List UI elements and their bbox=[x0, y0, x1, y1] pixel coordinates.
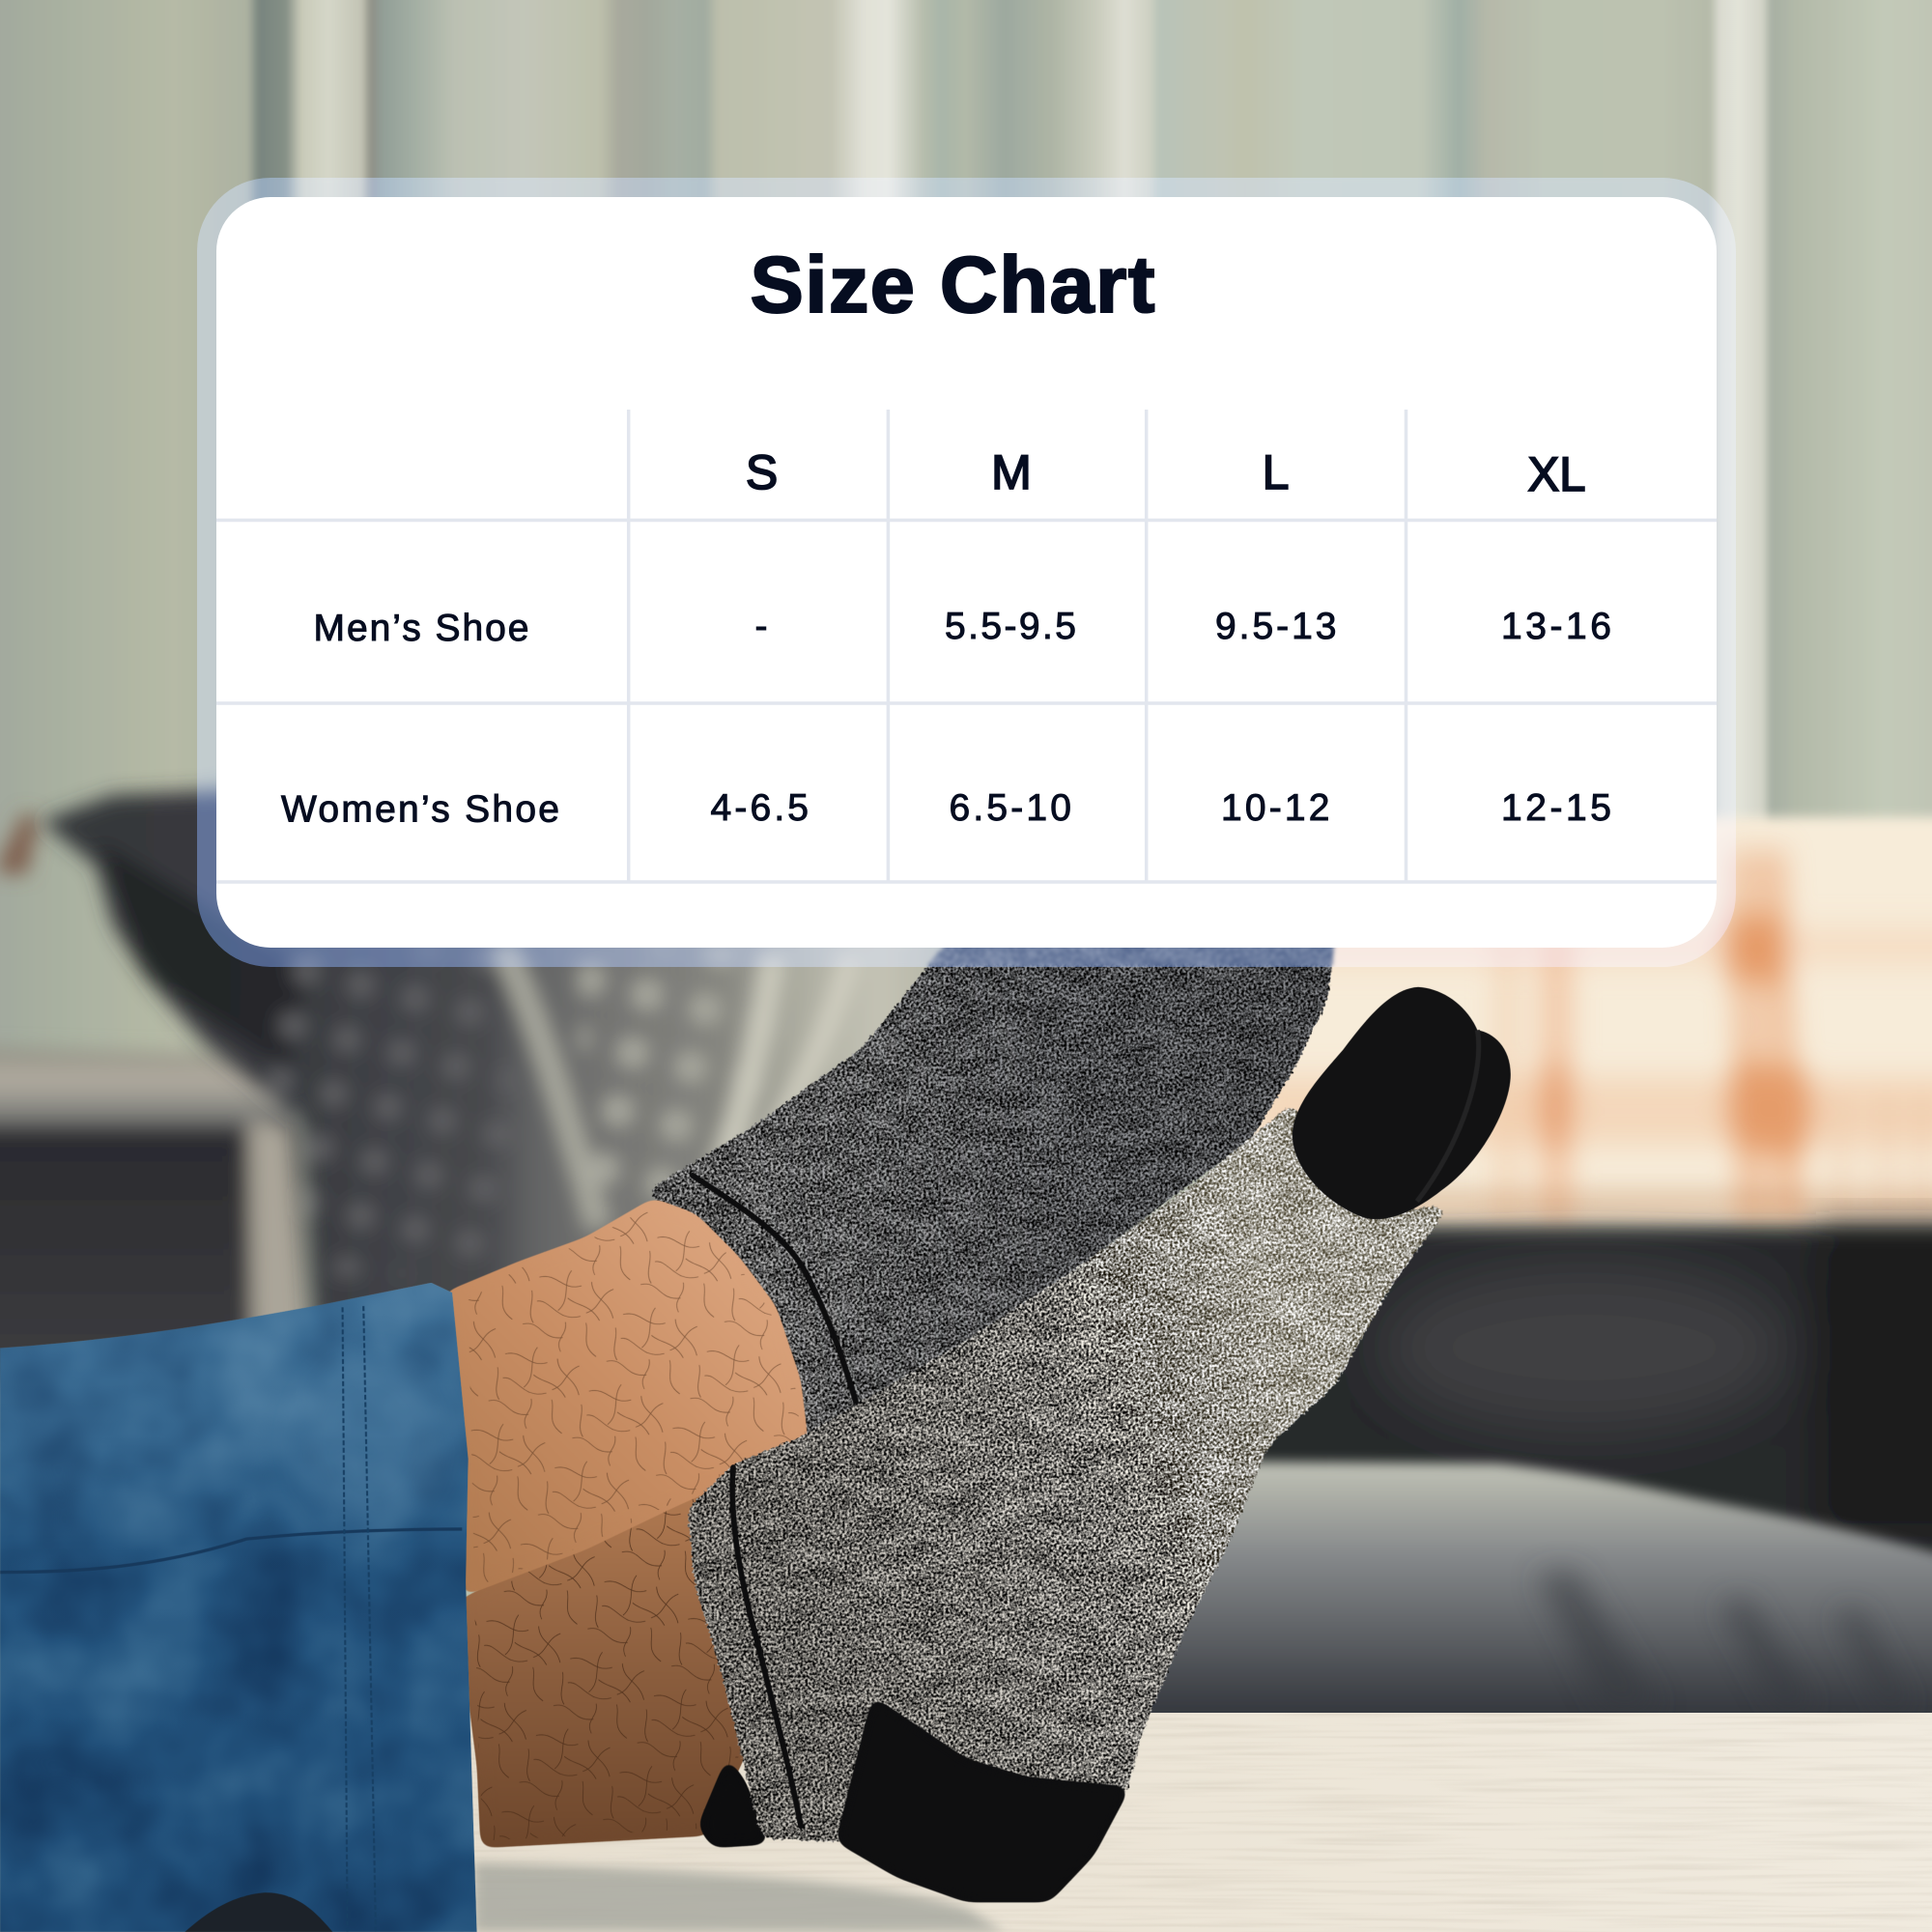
column headers: L bbox=[1263, 445, 1289, 499]
column headers bbox=[746, 445, 1586, 501]
row: women's shoe sizes: 10-12 bbox=[1221, 787, 1329, 829]
panel: size chart card bbox=[216, 197, 1717, 948]
plaid blanket bbox=[1236, 817, 1932, 1227]
blue trousers bbox=[0, 1283, 477, 1932]
frosted frame tint bbox=[197, 178, 1736, 967]
front sock bbox=[688, 1103, 1452, 1842]
feet and legs bbox=[0, 924, 1511, 1932]
column headers: M bbox=[991, 445, 1032, 499]
front sock stripe bbox=[732, 1467, 801, 1826]
row: men's shoe sizes: 9.5-13 bbox=[1215, 606, 1337, 647]
row: men's shoe sizes: Men’s Shoe bbox=[313, 608, 529, 649]
curtains bbox=[0, 0, 1932, 1111]
row: men's shoe sizes: - bbox=[755, 606, 767, 647]
grey cushion bbox=[1111, 1461, 1932, 1729]
title: Size Chart bbox=[750, 240, 1155, 329]
column headers: XL bbox=[1528, 447, 1586, 501]
pillow tag bbox=[0, 811, 39, 874]
patterned pillow bbox=[35, 776, 918, 1308]
upper leg bbox=[443, 1198, 809, 1597]
back sock stripe bbox=[693, 1176, 856, 1404]
row: women's shoe sizes: Women’s Shoe bbox=[281, 788, 559, 831]
row: women's shoe sizes: 6.5-10 bbox=[949, 787, 1071, 829]
small heel tab bbox=[697, 1756, 770, 1848]
row: men's shoe sizes: 5.5-9.5 bbox=[945, 606, 1076, 647]
lower leg bbox=[456, 1454, 752, 1848]
row: women's shoe sizes: 4-6.5 bbox=[711, 787, 809, 829]
black heel bbox=[836, 1695, 1131, 1902]
row: women's shoe sizes: 12-15 bbox=[1501, 787, 1611, 829]
row: men's shoe sizes bbox=[313, 606, 1611, 649]
column headers: S bbox=[746, 445, 778, 499]
table top bbox=[464, 1713, 1932, 1932]
back sock bbox=[643, 924, 1337, 1466]
dark sofa back bbox=[1111, 1227, 1932, 1729]
sofa arm bbox=[0, 1048, 311, 1381]
black toe bbox=[1293, 987, 1511, 1219]
frosted frame blur bbox=[197, 178, 1736, 967]
row: men's shoe sizes: 13-16 bbox=[1501, 606, 1611, 647]
row: women's shoe sizes bbox=[281, 787, 1611, 831]
